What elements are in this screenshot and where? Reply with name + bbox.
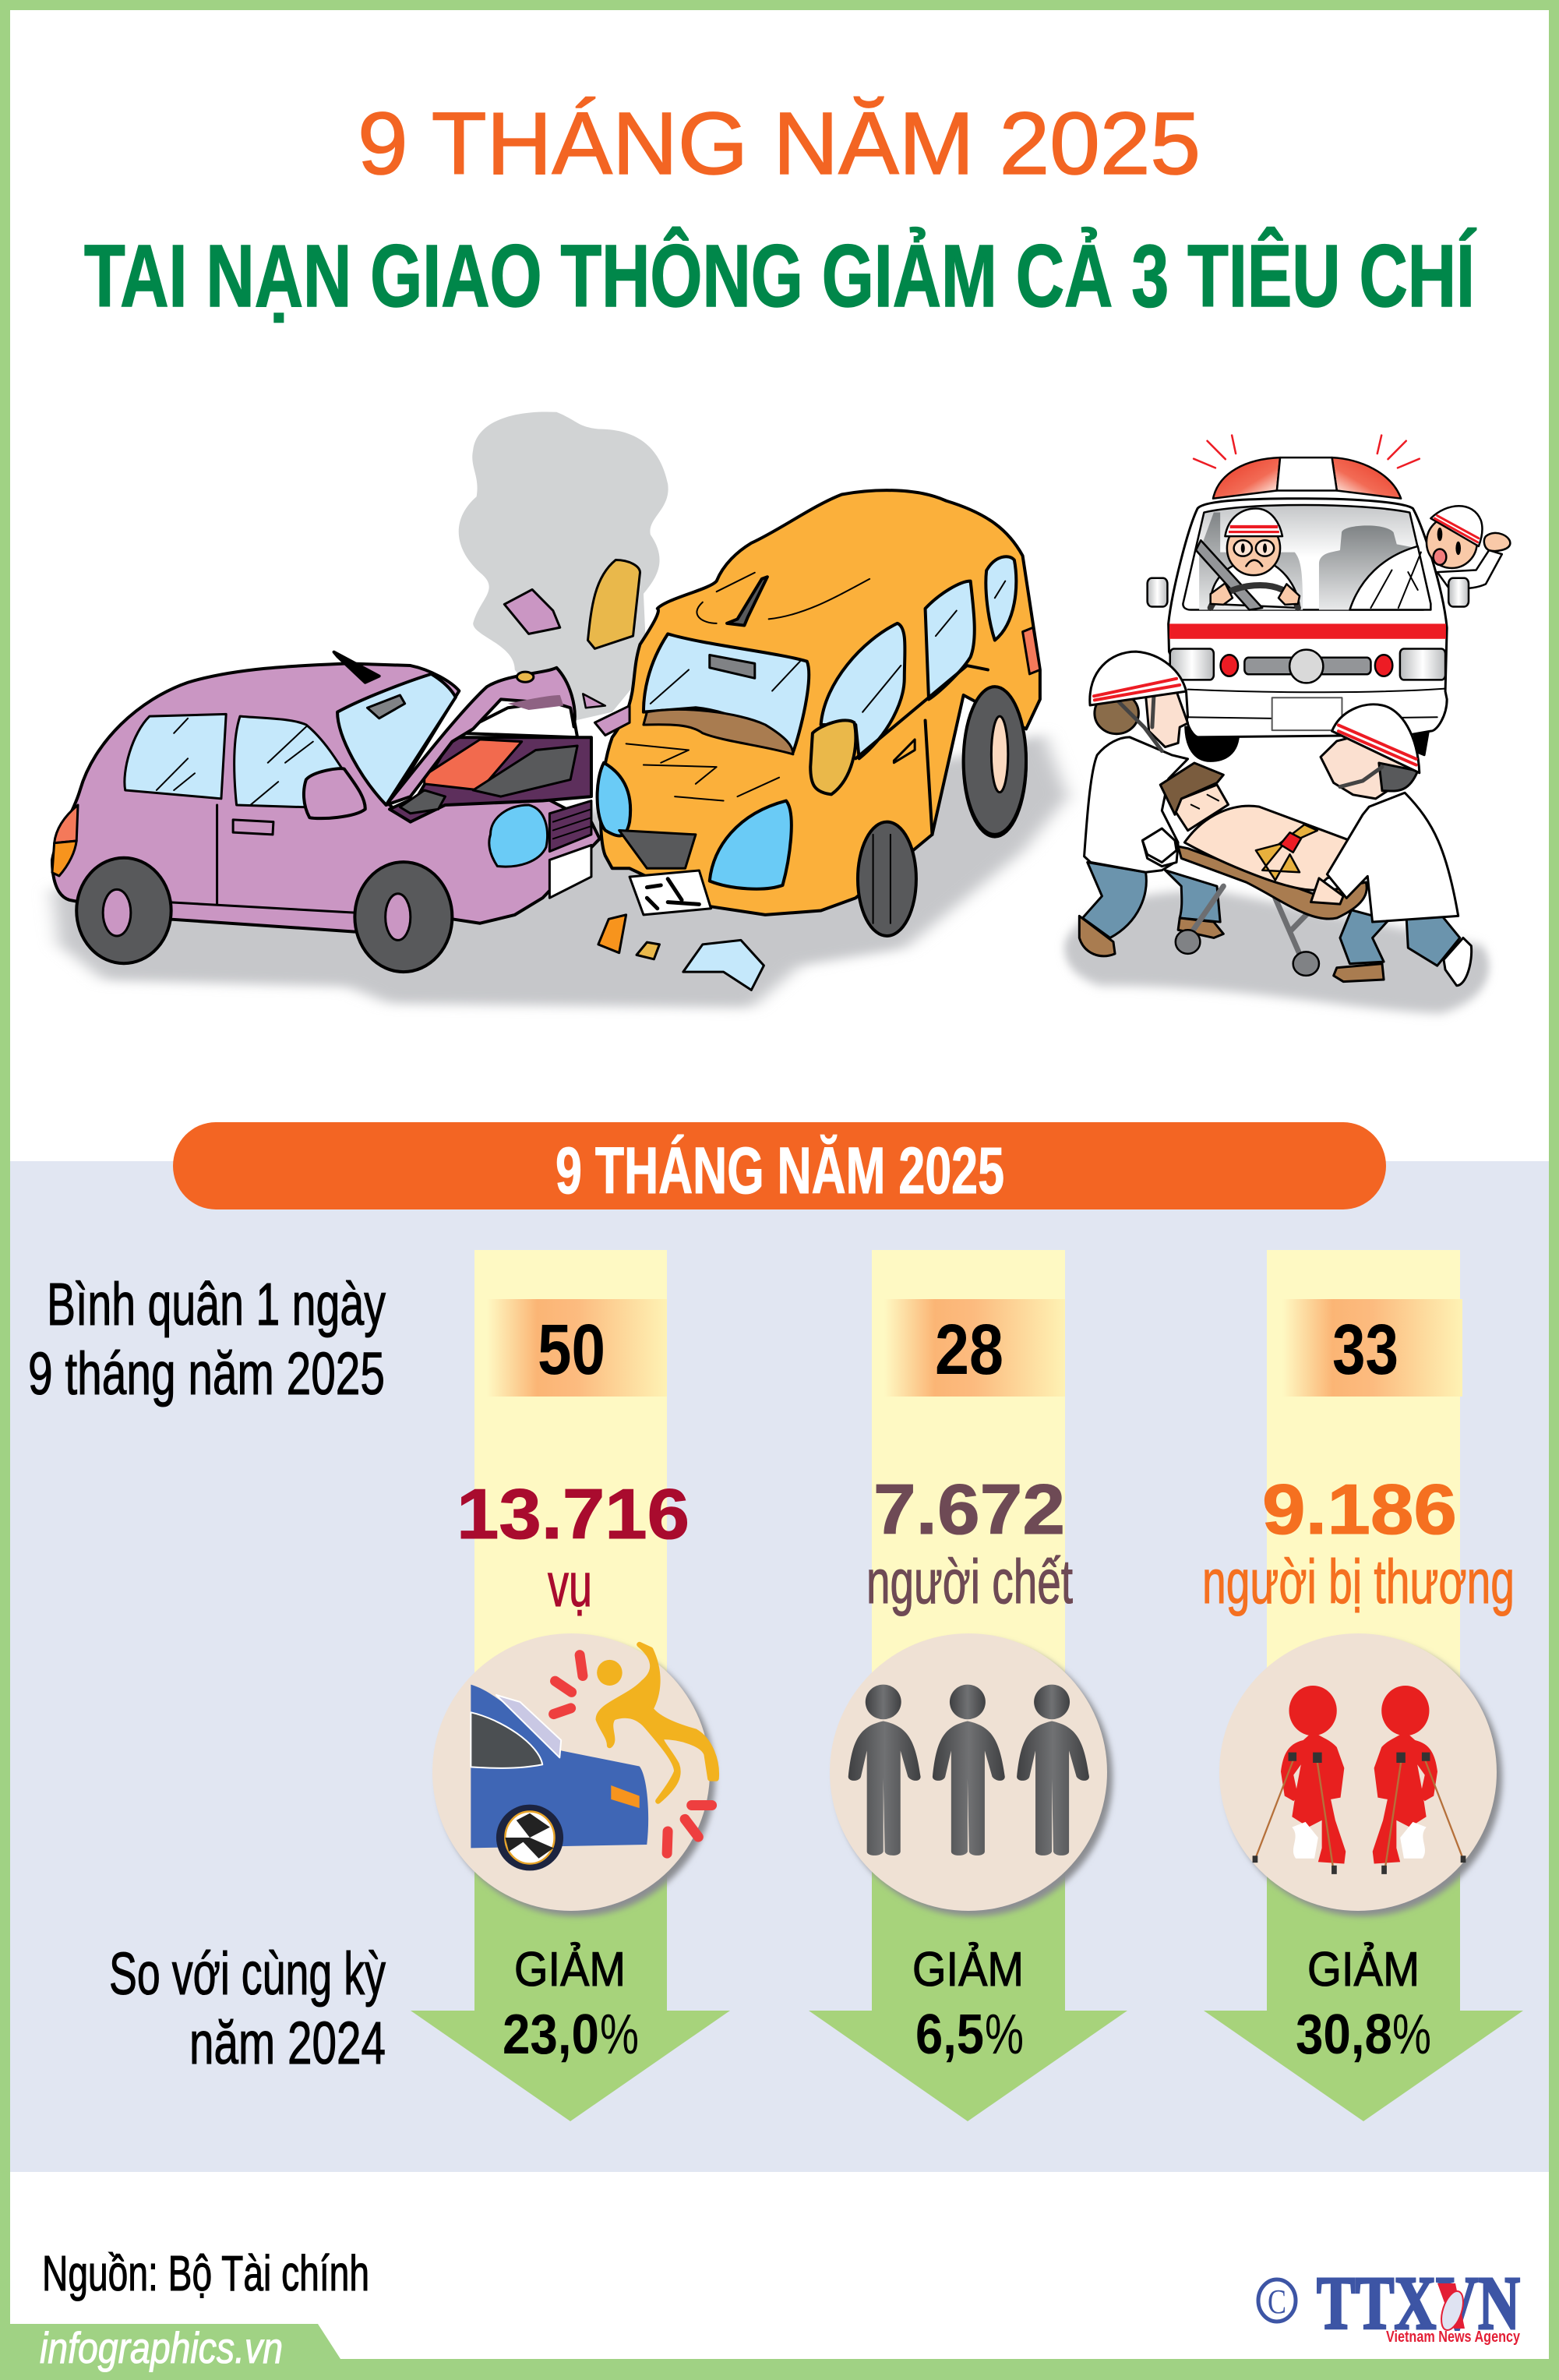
- illustration: ambulance and paramedics: [1064, 436, 1510, 1013]
- yellow band: [474, 1250, 667, 1780]
- row label: daily average: [28, 1271, 386, 1407]
- panel: statistics background: [10, 1161, 1549, 2172]
- purple car: [52, 652, 600, 972]
- change text: GIẢM: [912, 1943, 1024, 1997]
- change text: %: [600, 2004, 639, 2066]
- icon: red figures on crutches: [1219, 1633, 1502, 1916]
- change text: [912, 1943, 1024, 2066]
- flying debris: [504, 560, 764, 990]
- daily value box: [1282, 1299, 1462, 1397]
- row label: compared with 2024: So với cùng kỳ: [109, 1940, 386, 2007]
- change text: %: [1392, 2004, 1431, 2066]
- ambulance: [1148, 436, 1510, 761]
- total deaths: người chết: [866, 1547, 1073, 1616]
- change text: GIẢM: [1307, 1943, 1420, 1997]
- daily value box: 28: [935, 1310, 1003, 1390]
- icon: three dark figures: [830, 1633, 1113, 1916]
- down arrow: [411, 1777, 730, 2121]
- header pill: [173, 1122, 1386, 1209]
- row label: daily average: Bình quân 1 ngày: [47, 1271, 386, 1338]
- daily value box: [884, 1299, 1065, 1397]
- down arrow: [1204, 1777, 1523, 2121]
- column 1: accidents: [411, 1250, 730, 2121]
- change text: GIẢM: [514, 1943, 626, 1997]
- total accidents: vụ: [548, 1550, 592, 1619]
- change text: 6,5: [915, 2004, 984, 2066]
- icon: car hitting person: [432, 1633, 717, 1916]
- paramedic left: [1079, 651, 1223, 956]
- row label: compared with 2024: [109, 1940, 386, 2077]
- change text: [503, 1943, 639, 2066]
- total accidents: 13.716: [457, 1475, 690, 1554]
- footer website tab: infographics.vn: [40, 2323, 283, 2372]
- illustration: car crash: [52, 411, 1068, 1008]
- daily value box: 33: [1332, 1310, 1399, 1390]
- down arrow: [809, 1777, 1127, 2121]
- agency name: Vietnam News Agency: [1386, 2329, 1521, 2346]
- smoke: [459, 411, 668, 725]
- ground shadow: [52, 733, 1068, 1008]
- source: Nguồn: Bộ Tài chính: [42, 2245, 369, 2301]
- title: [84, 94, 1476, 325]
- row label: compared with 2024: năm 2024: [189, 2010, 386, 2077]
- yellow van: [598, 490, 1040, 936]
- total injured: [1202, 1471, 1515, 1616]
- daily value box: [487, 1299, 667, 1397]
- column 3: injuries: [1202, 1250, 1523, 2121]
- total accidents: [457, 1475, 690, 1619]
- change text: 23,0: [503, 2004, 599, 2066]
- paramedic right: [1311, 704, 1472, 986]
- total deaths: 7.672: [873, 1471, 1065, 1549]
- logo: TTXVN: [1258, 2262, 1521, 2346]
- change text: [1296, 1943, 1431, 2066]
- globe: [1437, 2289, 1467, 2332]
- red V accent: [1437, 2283, 1465, 2329]
- daily value box: 50: [538, 1310, 605, 1390]
- title line 1: 9 THÁNG NĂM 2025: [358, 94, 1201, 192]
- copyright mark: C: [1268, 2283, 1286, 2321]
- row label: daily average: 9 tháng năm 2025: [28, 1340, 385, 1407]
- ground shadow: [1064, 890, 1489, 1013]
- copyright mark: [1258, 2279, 1296, 2322]
- yellow band: [1267, 1250, 1460, 1780]
- yellow band: [872, 1250, 1065, 1780]
- total injured: 9.186: [1262, 1471, 1457, 1549]
- column 2: deaths: [809, 1250, 1127, 2121]
- total deaths: [866, 1471, 1073, 1616]
- change text: 30,8: [1296, 2004, 1392, 2066]
- change text: %: [985, 2004, 1024, 2066]
- stretcher with patient: [1142, 763, 1367, 976]
- pill label: 9 THÁNG NĂM 2025: [556, 1134, 1004, 1207]
